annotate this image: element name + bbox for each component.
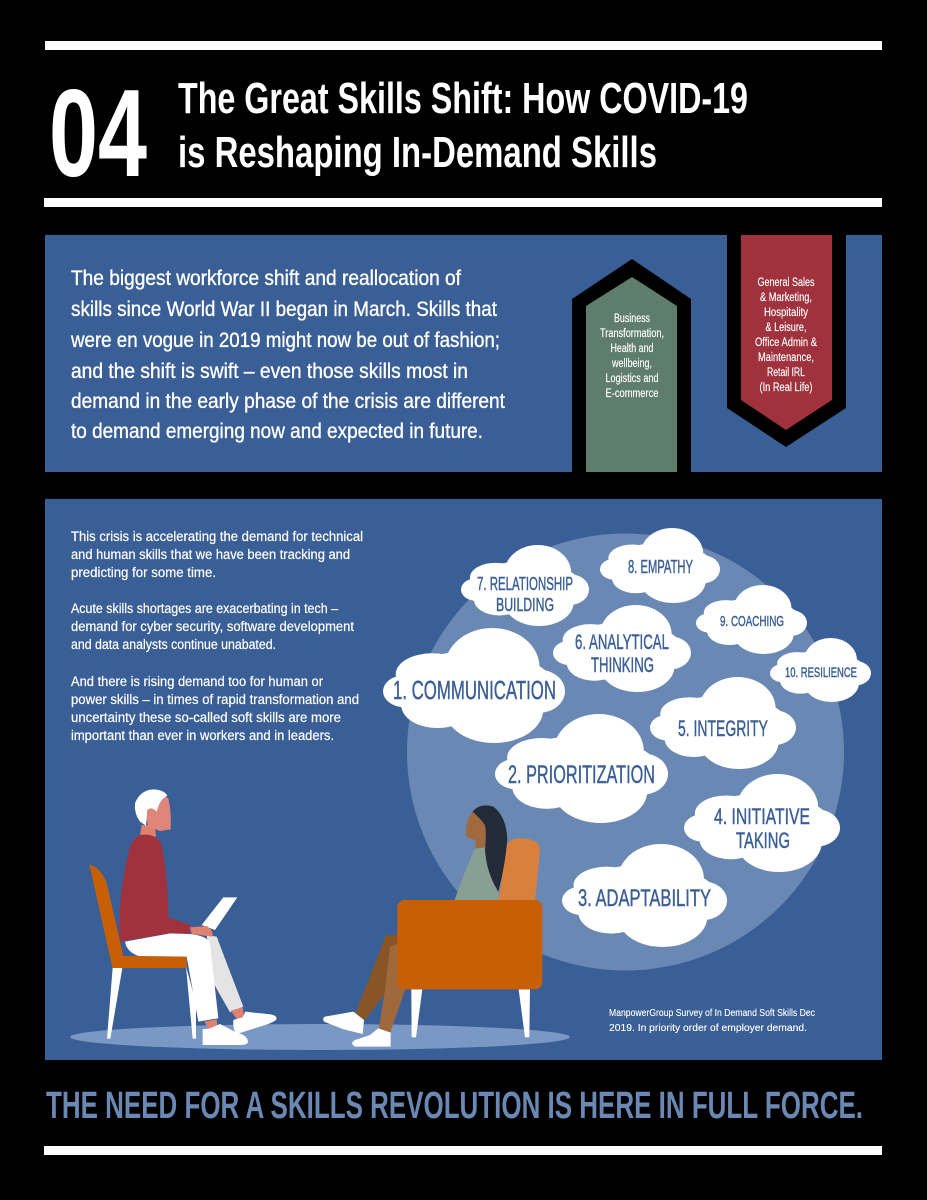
- intro text: and the shift is swift – even those skills most in: [71, 360, 468, 383]
- cloud 5: 5. INTEGRITY: [678, 716, 768, 741]
- laptop: [202, 897, 237, 930]
- arrow down: declining sectors: & Leisure,: [766, 322, 806, 334]
- cloud 7: 7. RELATIONSHIP: [477, 574, 573, 594]
- head and neck: [466, 811, 487, 848]
- cloud 6: 6. ANALYTICAL: [575, 631, 669, 654]
- body text: [71, 529, 363, 743]
- hair: [135, 789, 167, 826]
- arrow down: declining sectors: Maintenance,: [758, 352, 814, 364]
- cloud 4: 4. INITIATIVE: [714, 804, 810, 829]
- title: is Reshaping In-Demand Skills: [178, 128, 657, 177]
- arrow up: growing sectors: Health and: [610, 343, 654, 355]
- head: [145, 797, 171, 831]
- far leg: [207, 935, 243, 1012]
- cloud 4: [684, 774, 840, 872]
- intro text: skills since World War II began in March. Skills that: [71, 298, 497, 321]
- cloud 1: [383, 628, 565, 743]
- cloud 6: [553, 605, 691, 692]
- body text: important than ever in workers and in leaders.: [71, 728, 334, 743]
- shirt: [454, 847, 499, 902]
- bottom rule: [44, 1146, 882, 1155]
- cloud 2: [495, 714, 668, 823]
- cloud 7: [461, 545, 589, 626]
- intro text: [70, 267, 505, 443]
- cloud 6: THINKING: [591, 654, 654, 677]
- source note: ManpowerGroup Survey of In Demand Soft Skills Dec: [609, 1007, 815, 1019]
- top rule: [45, 41, 882, 50]
- cloud 4: TAKING: [736, 828, 790, 853]
- body text: demand for cyber security, software development: [71, 619, 354, 634]
- cloud 2: 2. PRIORITIZATION: [508, 761, 655, 789]
- panel: intro: [45, 235, 882, 472]
- cloud 5: [650, 677, 796, 769]
- chair: [89, 864, 196, 1039]
- body text: Acute skills shortages are exacerbating in tech –: [71, 601, 338, 616]
- arrow up: growing sectors: [572, 259, 691, 472]
- neck: [140, 825, 156, 837]
- body text: And there is rising demand too for human or: [71, 674, 323, 689]
- cloud 3: 3. ADAPTABILITY: [578, 885, 711, 912]
- cloud 3: [562, 844, 727, 947]
- arrow down: declining sectors: (In Real Life): [760, 382, 813, 394]
- arrow up: growing sectors: Logistics and: [606, 373, 658, 385]
- body text: predicting for some time.: [71, 565, 216, 580]
- arrow down: declining sectors: & Marketing,: [760, 292, 812, 304]
- panel: soft skills: [45, 499, 882, 1060]
- title: [178, 74, 748, 177]
- arrow down: declining sectors: [727, 235, 846, 447]
- torso: [119, 835, 191, 942]
- section number: 04: [49, 65, 147, 203]
- floor ellipse: [70, 1024, 570, 1050]
- cloud 8: [600, 528, 720, 603]
- hair: [473, 805, 507, 892]
- body text: uncertainty these so-called soft skills are more: [71, 710, 341, 725]
- body text: This crisis is accelerating the demand for technical: [71, 529, 363, 544]
- arrow down: declining sectors: Hospitality: [764, 307, 808, 319]
- intro text: to demand emerging now and expected in future.: [71, 420, 483, 443]
- figure: man on chair with laptop: [89, 789, 277, 1045]
- armchair body: [397, 900, 542, 989]
- figure: woman in armchair: [323, 805, 542, 1047]
- shoes: [323, 1012, 364, 1034]
- intro text: were en vogue in 2019 might now be out of fashion;: [70, 329, 500, 352]
- arrow down: declining sectors: Retail IRL: [767, 367, 805, 379]
- arrow up: growing sectors: E-commerce: [606, 388, 658, 400]
- armchair legs: [411, 989, 422, 1037]
- arrow up: growing sectors: wellbeing,: [611, 358, 652, 370]
- arrow up: growing sectors: Transformation,: [600, 328, 664, 340]
- cloud 9: [696, 585, 807, 654]
- hand: [190, 926, 213, 937]
- cloud 7: BUILDING: [496, 595, 554, 615]
- intro text: The biggest workforce shift and reallocation of: [71, 267, 461, 290]
- cloud 10: [770, 638, 871, 702]
- cloud 1: 1. COMMUNICATION: [393, 675, 556, 705]
- armchair back: [498, 838, 540, 902]
- body text: and human skills that we have been tracking and: [71, 547, 350, 562]
- cloud 9: 9. COACHING: [720, 613, 784, 630]
- title rule: [44, 198, 882, 207]
- body text: power skills – in times of rapid transformation and: [71, 692, 359, 707]
- arrow down: declining sectors: Office Admin &: [755, 337, 817, 349]
- arrow down: declining sectors: General Sales: [758, 277, 815, 289]
- big circle backdrop: [407, 534, 844, 970]
- source note: 2019. In priority order of employer demand.: [609, 1022, 807, 1034]
- cloud 10: 10. RESILIENCE: [785, 664, 857, 680]
- source note: [609, 1007, 815, 1034]
- body text: and data analysts continue unabated.: [71, 637, 276, 652]
- near leg: [125, 933, 218, 1022]
- cloud 8: 8. EMPATHY: [628, 557, 693, 577]
- intro text: demand in the early phase of the crisis are different: [71, 390, 505, 413]
- arrow up: growing sectors: Business: [614, 313, 650, 325]
- legs: [354, 935, 398, 1020]
